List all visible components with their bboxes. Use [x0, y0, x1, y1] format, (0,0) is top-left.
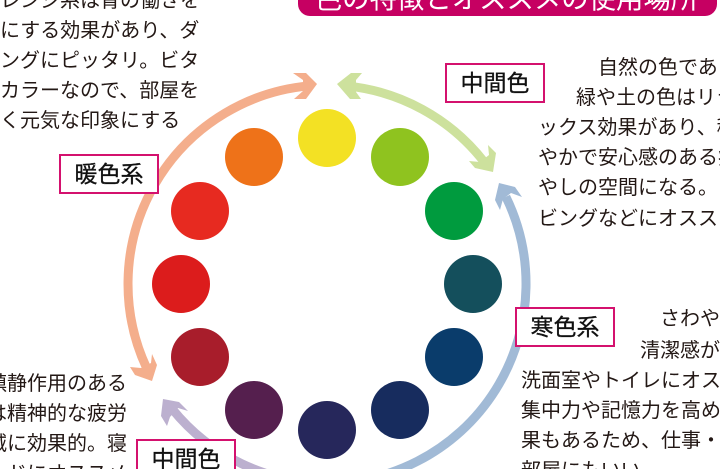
label: warm colors: [59, 154, 159, 194]
text block: cool colors: [521, 308, 720, 469]
color circles: [152, 109, 502, 459]
label: intermediate colors bottom: [136, 439, 236, 469]
arrow: intermediate colors (purple): [161, 399, 327, 469]
text block: natural colors: [538, 57, 720, 230]
text block: warm colors: ングにピッタリ。ビタ: [0, 50, 199, 72]
title banner: [298, 0, 717, 16]
label: intermediate colors top: [445, 63, 545, 103]
label: intermediate colors top: 中間色: [460, 70, 530, 96]
label: cool colors: [515, 307, 615, 347]
text block: warm colors: にする効果があり、ダ: [0, 20, 199, 42]
label: cool colors: 寒色系: [530, 314, 600, 340]
arrow: intermediate colors (green): [337, 73, 496, 172]
label: warm colors: 暖色系: [74, 161, 144, 187]
text block: natural colors: やしの空間になる。: [538, 177, 718, 199]
arrow: warm colors (orange): [128, 73, 317, 381]
text block: warm colors: [0, 0, 200, 132]
text block: calming colors: [0, 373, 127, 469]
text block: warm colors: く元気な印象にする: [0, 110, 180, 132]
arrow: cool colors (blue): [327, 183, 526, 469]
text block: warm colors: カラーなので、部屋を: [0, 80, 199, 102]
